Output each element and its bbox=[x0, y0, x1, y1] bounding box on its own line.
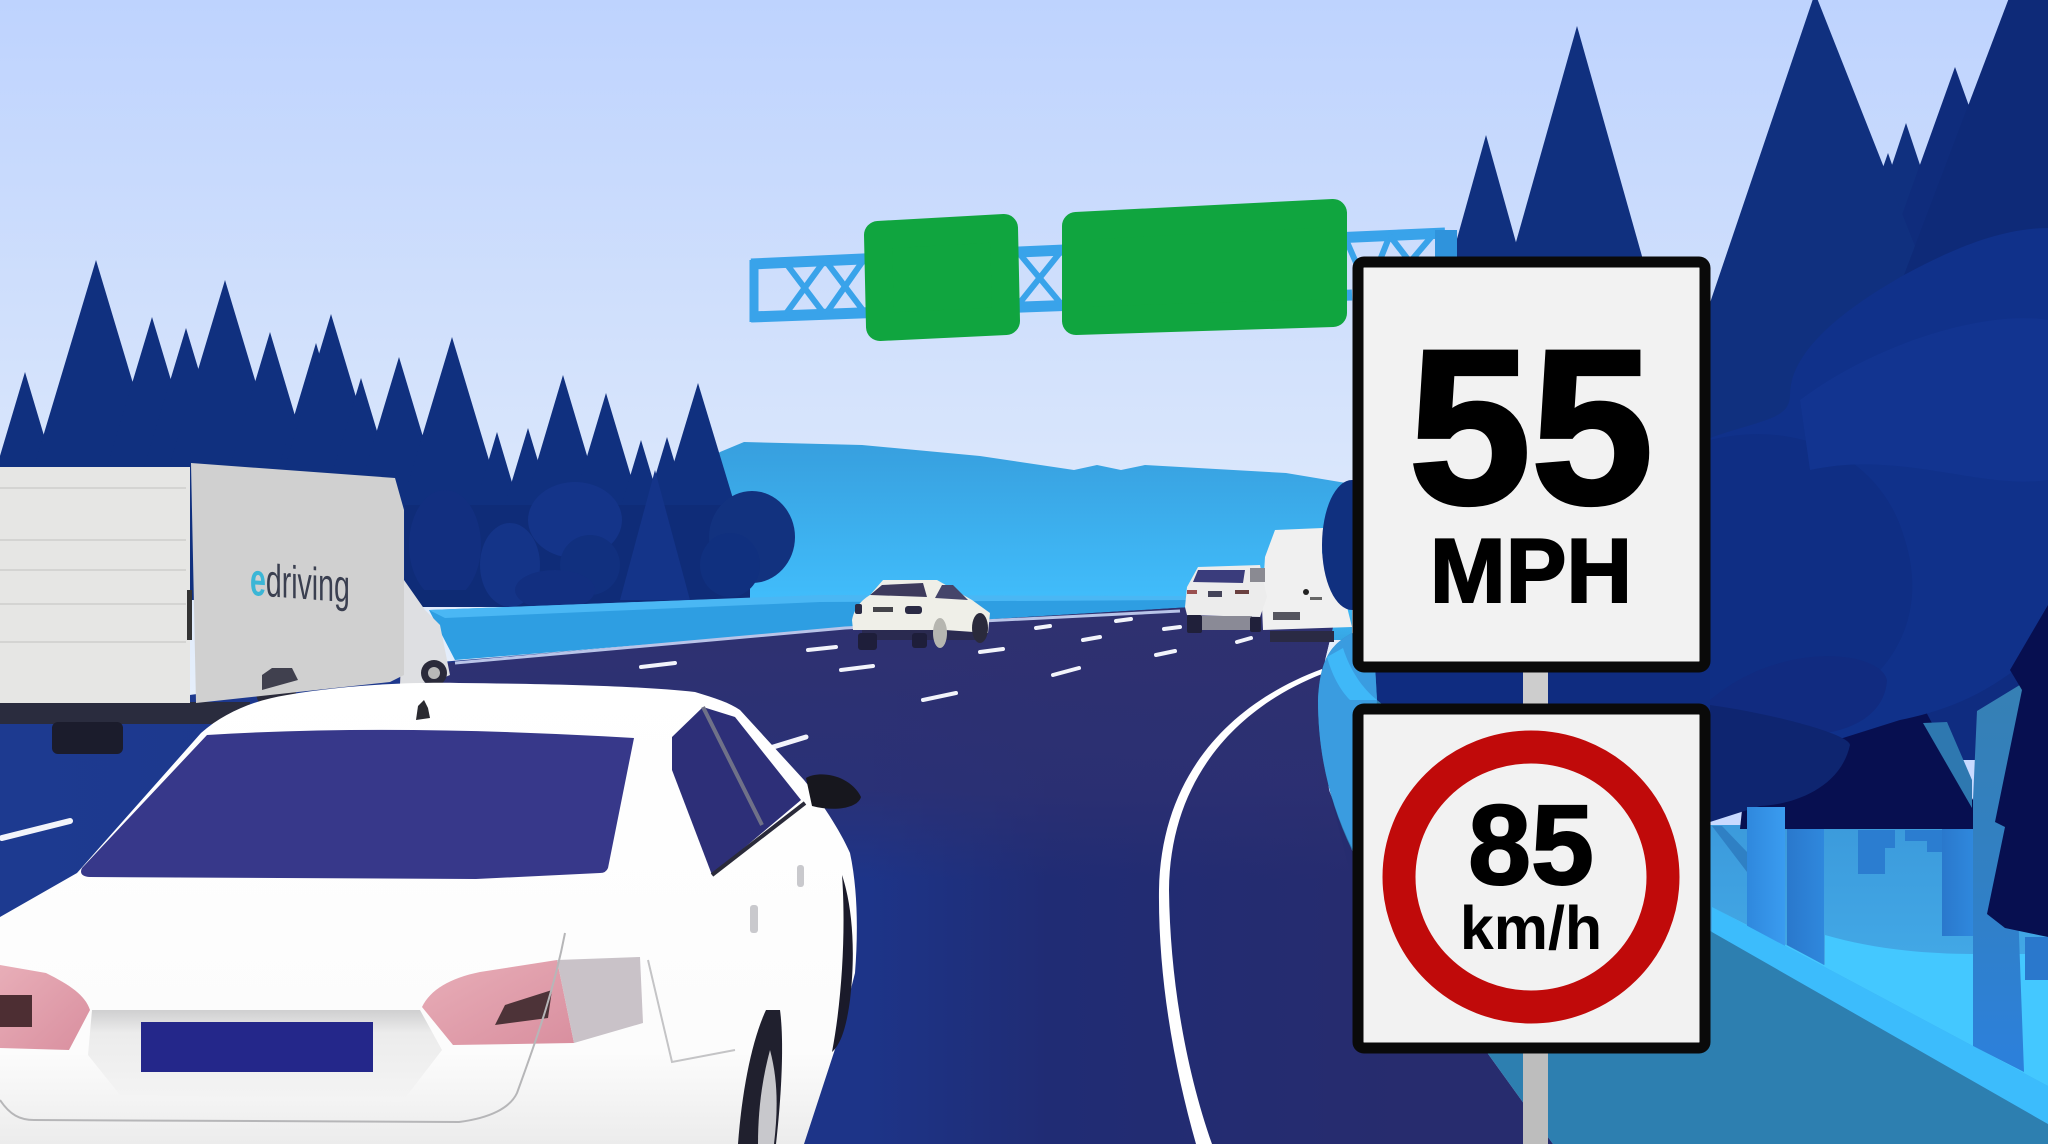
antenna bbox=[416, 700, 430, 720]
foliage lobes bbox=[1710, 228, 2048, 780]
rear wheel bbox=[738, 1010, 782, 1144]
side window bbox=[672, 707, 801, 875]
speed sign: 85 km/h: km/h bbox=[1460, 894, 1602, 962]
tree trunks bbox=[1712, 683, 2048, 1072]
right forest bbox=[1360, 0, 2048, 829]
side mirror bbox=[806, 774, 861, 809]
main white car bbox=[0, 683, 861, 1144]
rear window bbox=[81, 730, 634, 879]
white car in lane bbox=[852, 580, 990, 650]
right barrier bbox=[1318, 633, 2048, 1144]
far tire bbox=[832, 875, 853, 1052]
dark tree blob beside van bbox=[1322, 480, 1382, 610]
right ground bbox=[1700, 825, 2048, 1125]
truck box rear bbox=[0, 467, 190, 703]
speed sign: 85 km/h bbox=[1358, 709, 1705, 1048]
speed sign: 85 km/h: 85 bbox=[1468, 782, 1594, 908]
road surface bbox=[0, 598, 1553, 1144]
white van bbox=[1262, 528, 1352, 642]
left forest bbox=[0, 260, 795, 610]
road left edge line bbox=[455, 611, 1180, 663]
green sign large bbox=[1076, 213, 1333, 321]
distant hills bbox=[690, 442, 1352, 640]
sky bbox=[0, 0, 2048, 700]
truck cab bbox=[400, 580, 450, 685]
license plate bbox=[141, 1022, 373, 1072]
truck box side bbox=[191, 463, 404, 703]
left tail light bbox=[0, 965, 90, 1050]
road right edge curve bbox=[1159, 669, 1322, 1144]
right foreground conifer bbox=[1987, 605, 2048, 937]
car body bbox=[0, 683, 857, 1144]
sign pole bbox=[1523, 670, 1548, 1144]
left barrier wall bbox=[429, 595, 1190, 660]
lane dashes bbox=[2, 619, 1251, 838]
red ring bbox=[1399, 747, 1663, 1007]
dark conifer skirt bbox=[1740, 710, 1973, 829]
green sign small bbox=[878, 228, 1006, 327]
speed sign: 55 MPH: MPH bbox=[1430, 521, 1632, 622]
trunk panel bbox=[88, 1010, 442, 1102]
overhead gantry bbox=[751, 213, 1457, 327]
bumper and boot lines bbox=[0, 933, 565, 1122]
right tail light bbox=[422, 957, 643, 1045]
speed sign: 55 MPH: 55 bbox=[1409, 304, 1653, 550]
delivery truck bbox=[0, 463, 450, 754]
SUV bbox=[1185, 565, 1267, 633]
truck logo: edriving bbox=[250, 554, 350, 613]
speed sign: 55 MPH bbox=[1358, 262, 1705, 667]
truck undercarriage bbox=[0, 702, 250, 724]
door handles bbox=[750, 905, 758, 933]
gantry frame bbox=[751, 233, 1445, 322]
